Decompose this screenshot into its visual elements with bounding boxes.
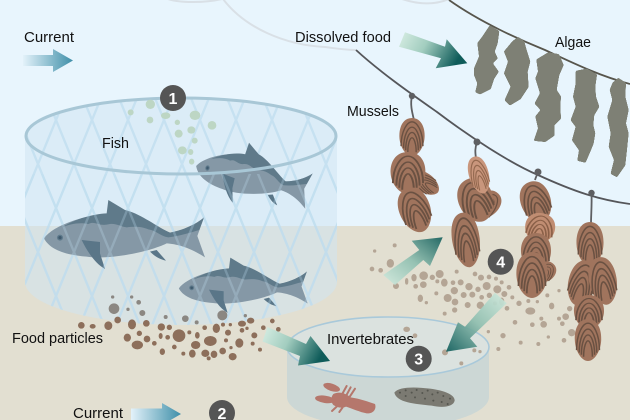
pale rope arcs	[168, 0, 449, 50]
arrow: particles down to invertebrates	[446, 293, 507, 352]
arrow: current top	[23, 49, 73, 72]
cage: back body and open top	[25, 97, 337, 325]
badge 3: 3	[414, 352, 423, 369]
hook knots	[409, 93, 595, 196]
food particles	[78, 296, 280, 360]
background: seabed	[0, 226, 630, 420]
label: dissolved food: Dissolved food	[295, 29, 391, 46]
label: algae: Algae	[555, 34, 591, 51]
fish: upper	[190, 132, 317, 219]
tub: body	[287, 317, 489, 420]
label: fish: Fish	[102, 135, 129, 152]
waste bubbles	[128, 100, 216, 165]
mussel cluster 4	[563, 222, 621, 361]
label: food particles: Food particles	[12, 330, 103, 347]
lobster	[315, 381, 375, 413]
label: invertebrates: Invertebrates	[327, 331, 414, 348]
badge 4: 4	[496, 255, 505, 272]
label: current top: Current	[24, 29, 75, 46]
mussel cluster 3	[515, 177, 560, 298]
arrow: particles up to mussels	[383, 237, 443, 285]
label: mussels: Mussels	[347, 103, 399, 120]
sea cucumber	[394, 387, 455, 407]
mussel cluster 2	[448, 154, 506, 269]
arrow: food particles to invertebrates	[262, 327, 330, 366]
cage: netting	[25, 97, 337, 325]
fish: large	[44, 200, 205, 269]
cage: rim	[26, 98, 336, 174]
mussel cluster 1	[391, 118, 444, 237]
fish: lower	[179, 258, 308, 313]
rope: mussel line	[356, 50, 630, 204]
badge 2	[209, 400, 235, 420]
rope: algae line	[449, 0, 630, 84]
arrow: current bottom	[131, 403, 181, 420]
background: water	[0, 0, 630, 227]
tub: opening	[287, 317, 489, 377]
badge 1: 1	[169, 91, 178, 108]
mussel hooks	[411, 96, 592, 224]
arrow: dissolved food to algae	[399, 32, 467, 68]
uneaten particles near mussels	[370, 244, 575, 365]
cage: netting over fish	[25, 174, 337, 325]
badge 1	[160, 85, 186, 111]
badge 3	[406, 346, 432, 372]
algae strands	[475, 27, 628, 176]
badge 4	[488, 249, 514, 275]
